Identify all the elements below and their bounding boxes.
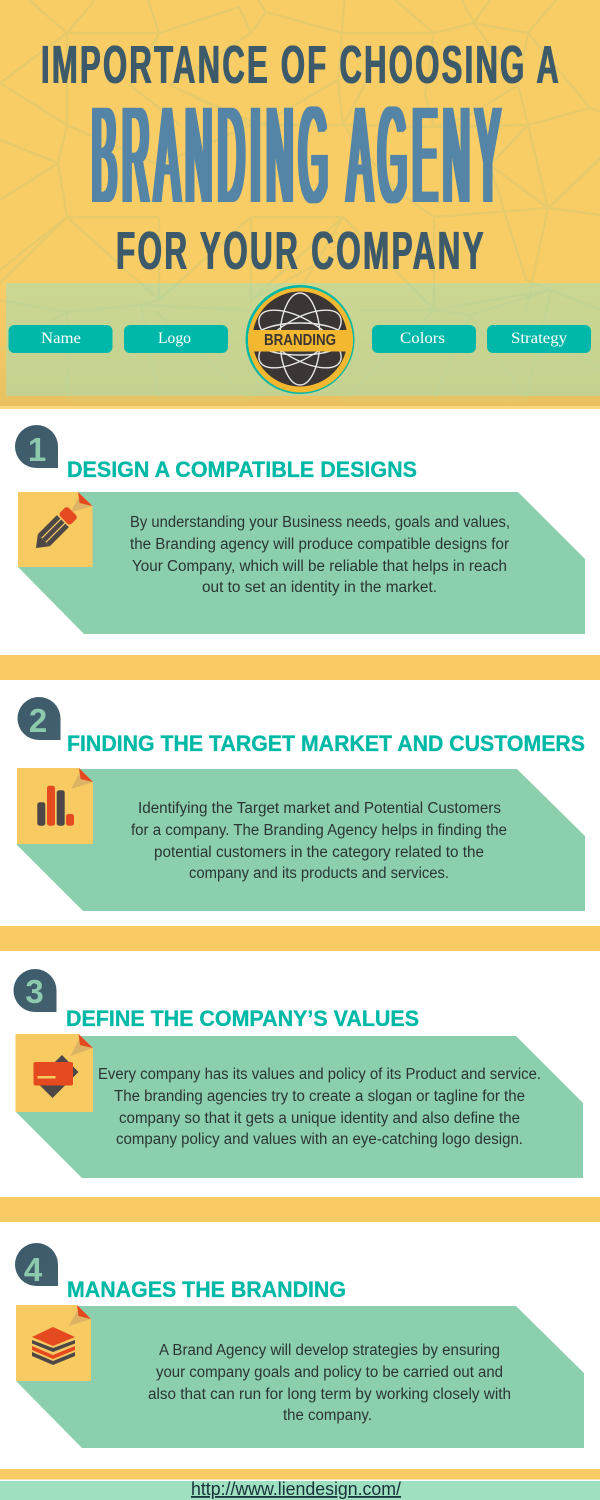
divider band 2	[0, 926, 600, 951]
text block 2	[131, 800, 507, 882]
text block 1: out to set an identity in the market.	[202, 579, 437, 596]
text block 4: also that can run for long term by working closely with	[148, 1386, 511, 1403]
number badge 2	[18, 697, 60, 740]
panel 3	[16, 1036, 583, 1178]
button: Strategy: Strategy	[511, 330, 567, 347]
branding band	[6, 283, 600, 396]
icon: branding logo: BRANDING	[264, 332, 336, 349]
heading 2: FINDING THE TARGET MARKET AND CUSTOMERS	[67, 731, 585, 756]
text block 1: Your Company, which will be reliable that helps in reach	[132, 558, 507, 575]
button: Name	[8, 325, 112, 353]
text block 3: company policy and values with an eye-catching logo design.	[116, 1131, 523, 1148]
panel 1	[18, 492, 585, 634]
text block 2: Identifying the Target market and Potential Customers	[138, 800, 501, 817]
icon: branding logo	[246, 285, 354, 394]
text block 3: The branding agencies try to create a slogan or tagline for the	[114, 1088, 525, 1105]
panel 4	[16, 1306, 584, 1448]
button: Name: Name	[41, 330, 81, 347]
text block 4: the company.	[283, 1407, 372, 1424]
number badge 1: 1	[28, 431, 46, 468]
text block 2: for a company. The Branding Agency helps in finding the	[131, 822, 507, 839]
text block 4: A Brand Agency will develop strategies by ensuring	[159, 1342, 500, 1359]
button: Colors: Colors	[400, 330, 445, 347]
text block 4	[148, 1342, 511, 1424]
panel 2	[17, 769, 585, 911]
number badge 3	[13, 969, 56, 1012]
text block 1: By understanding your Business needs, goals and values,	[130, 514, 510, 531]
button: Logo: Logo	[158, 330, 191, 347]
text block 2: potential customers in the category related to the	[154, 844, 484, 861]
footer url: http://www.liendesign.com/	[191, 1479, 401, 1499]
icon: bar chart note	[17, 768, 93, 844]
text block 2: company and its products and services.	[189, 865, 449, 882]
section 3	[13, 969, 583, 1178]
icon: card note	[16, 1034, 93, 1112]
header background	[0, 0, 600, 409]
number badge 2: 2	[29, 702, 47, 739]
text block 3: company so that it gets a unique identity and also define the	[119, 1110, 520, 1127]
button: Logo	[124, 325, 228, 353]
divider band 1	[0, 655, 600, 680]
heading 1: DESIGN A COMPATIBLE DESIGNS	[67, 457, 417, 482]
divider band 4	[0, 1469, 600, 1480]
text block 3	[98, 1066, 541, 1148]
section 4	[15, 1243, 584, 1448]
button: Colors	[372, 325, 476, 353]
icon: layers note	[16, 1305, 91, 1381]
number badge 1	[15, 425, 58, 468]
divider band 3	[0, 1197, 600, 1222]
text block 1	[130, 514, 510, 596]
text block 3: Every company has its values and policy of its Product and service.	[98, 1066, 541, 1083]
section 1	[15, 425, 585, 634]
section 2	[17, 697, 585, 911]
number badge 4: 4	[24, 1251, 43, 1288]
number badge 3: 3	[25, 973, 44, 1010]
heading 3: DEFINE THE COMPANY’S VALUES	[66, 1006, 419, 1031]
footer	[0, 1479, 600, 1500]
button: Strategy	[487, 325, 591, 353]
number badge 4	[15, 1243, 58, 1288]
heading 4: MANAGES THE BRANDING	[67, 1277, 346, 1302]
icon: pencil note	[18, 492, 92, 567]
title	[41, 35, 561, 281]
text block 1: the Branding agency will produce compatible designs for	[130, 536, 509, 553]
text block 4: your company goals and policy to be carried out and	[156, 1364, 503, 1381]
